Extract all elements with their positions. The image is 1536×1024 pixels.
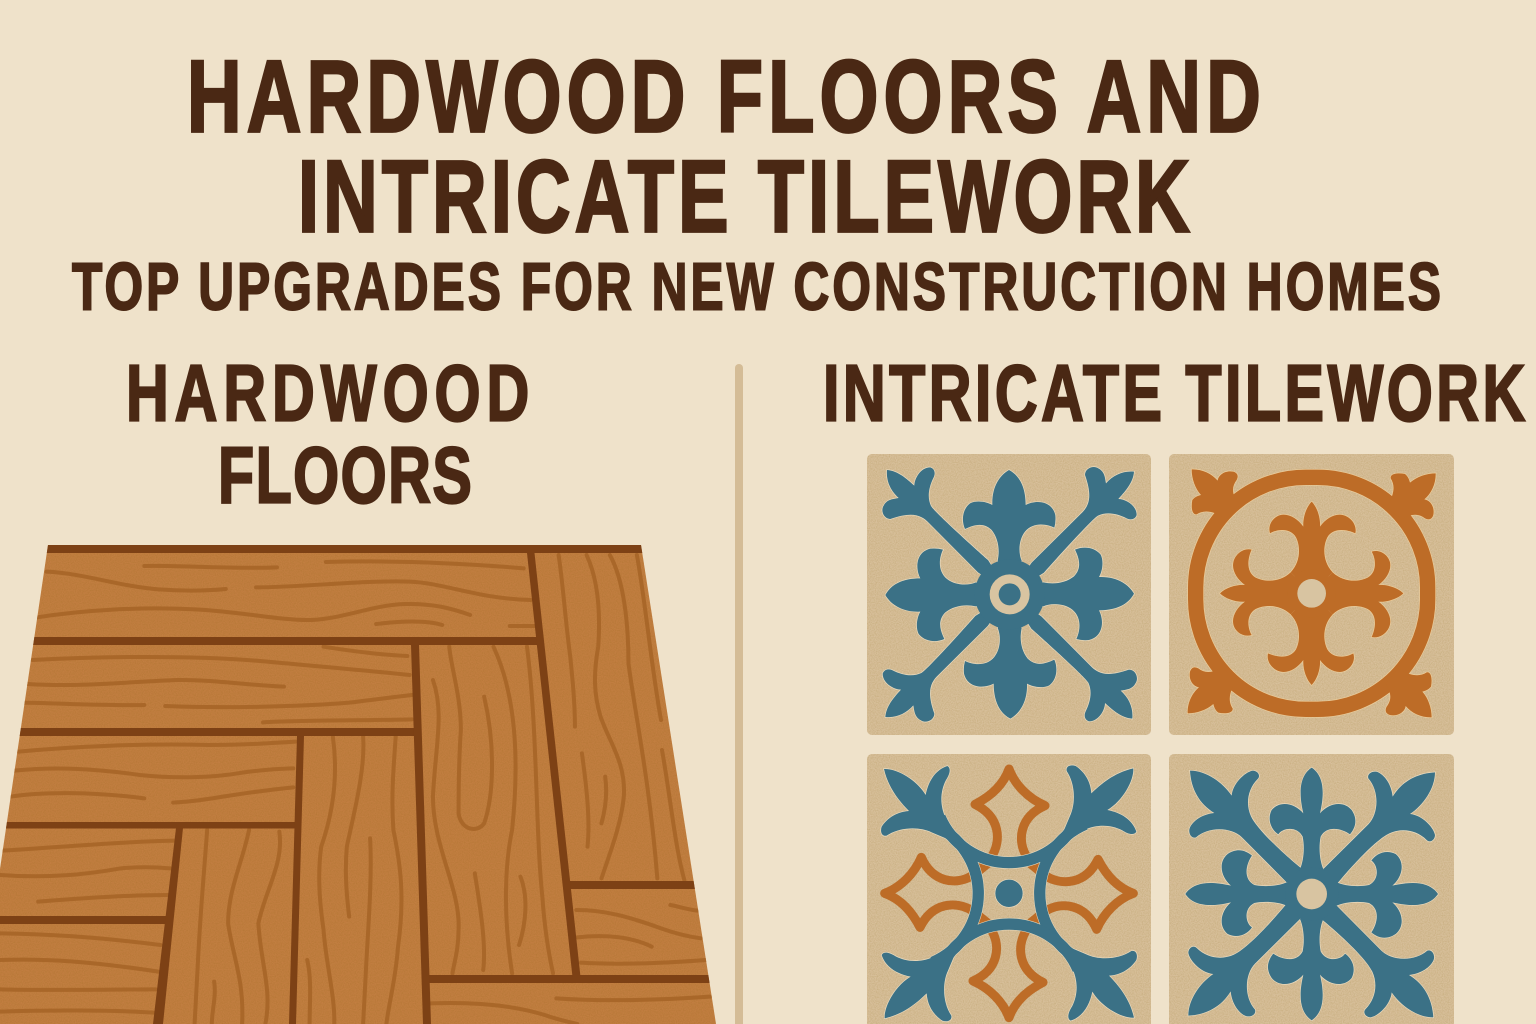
tile: blue floral cross xyxy=(867,454,1151,735)
subtitle: TOP UPGRADES FOR NEW CONSTRUCTION HOMES xyxy=(72,250,1441,324)
title xyxy=(187,41,1261,254)
heading: intricate tilework: INTRICATE TILEWORK xyxy=(823,348,1525,438)
heading: hardwood floors: FLOORS xyxy=(218,430,472,520)
title line 1: HARDWOOD FLOORS AND xyxy=(187,41,1261,154)
divider xyxy=(735,364,743,1024)
tile: blue fleur medallion xyxy=(1169,754,1454,1024)
panel: intricate tilework xyxy=(823,348,1525,1024)
heading: hardwood floors: HARDWOOD xyxy=(126,348,529,438)
tile: blue and orange star xyxy=(867,754,1151,1024)
tile: orange circle with cross xyxy=(1169,454,1454,735)
wood grain lines xyxy=(0,555,710,1024)
heading: hardwood floors xyxy=(126,348,529,520)
panel: hardwood floors xyxy=(0,348,726,1024)
plank seams xyxy=(0,545,726,1024)
title line 2: INTRICATE TILEWORK xyxy=(298,141,1190,254)
illustration: parquet wood floor xyxy=(0,545,726,1024)
